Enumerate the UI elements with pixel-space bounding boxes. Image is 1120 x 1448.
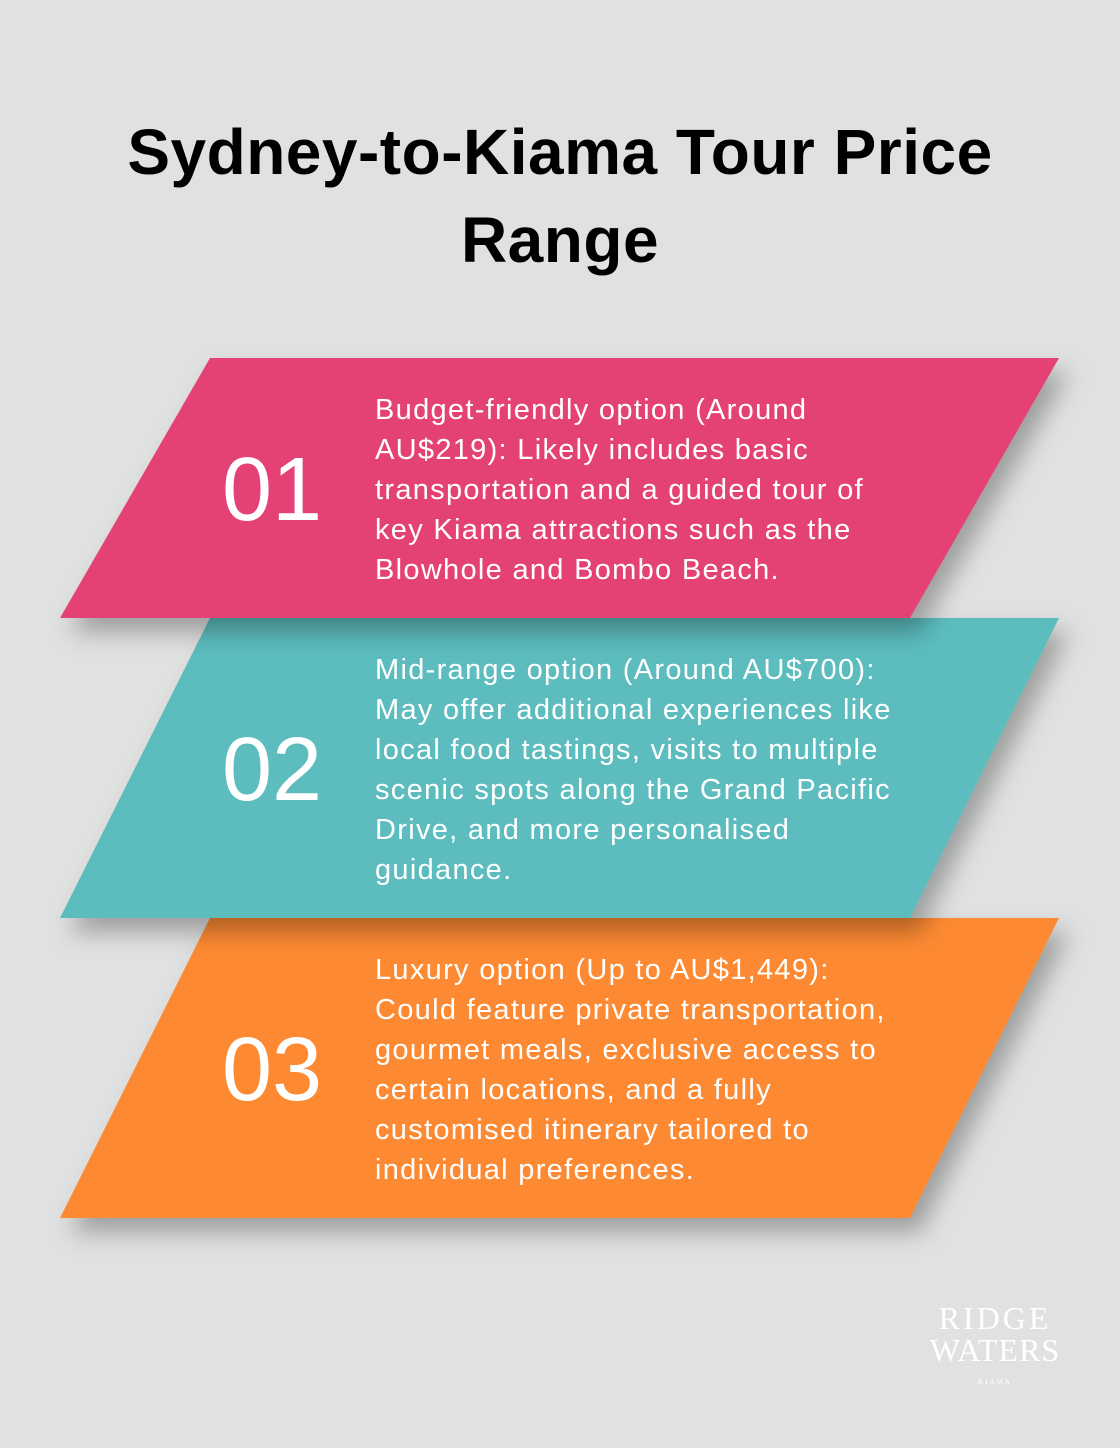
panel 2 xyxy=(60,618,1059,918)
title: Range xyxy=(461,204,659,276)
number 01: 01 xyxy=(222,440,322,540)
text 03: Could feature private transportation, xyxy=(375,994,886,1026)
text 02: local food tastings, visits to multiple xyxy=(375,734,879,766)
logo: KIAMA xyxy=(978,1378,1012,1386)
text 01: AU$219): Likely includes basic xyxy=(375,434,809,466)
text 02: Mid-range option (Around AU$700): xyxy=(375,654,876,686)
text 03: customised itinerary tailored to xyxy=(375,1114,810,1146)
text 01: key Kiama attractions such as the xyxy=(375,514,852,546)
title: Sydney-to-Kiama Tour Price xyxy=(127,116,993,188)
text 03: certain locations, and a fully xyxy=(375,1074,772,1106)
logo: RIDGE xyxy=(939,1300,1051,1336)
text 01: transportation and a guided tour of xyxy=(375,474,864,506)
logo xyxy=(930,1300,1060,1386)
number 03: 03 xyxy=(222,1020,322,1120)
panel 1 xyxy=(60,358,1059,618)
text 02: scenic spots along the Grand Pacific xyxy=(375,774,891,806)
text 01 xyxy=(375,394,864,586)
text 03: gourmet meals, exclusive access to xyxy=(375,1034,877,1066)
text 03: Luxury option (Up to AU$1,449): xyxy=(375,954,830,986)
logo: WATERS xyxy=(930,1332,1060,1368)
text 02 xyxy=(375,654,892,886)
text 03: individual preferences. xyxy=(375,1154,695,1186)
text 01: Budget-friendly option (Around xyxy=(375,394,807,426)
text 02: guidance. xyxy=(375,854,512,886)
number 02: 02 xyxy=(222,720,322,820)
panel 3 xyxy=(60,918,1059,1218)
text 02: May offer additional experiences like xyxy=(375,694,892,726)
title xyxy=(127,116,993,276)
text 03 xyxy=(375,954,886,1186)
text 01: Blowhole and Bombo Beach. xyxy=(375,554,780,586)
text 02: Drive, and more personalised xyxy=(375,814,790,846)
